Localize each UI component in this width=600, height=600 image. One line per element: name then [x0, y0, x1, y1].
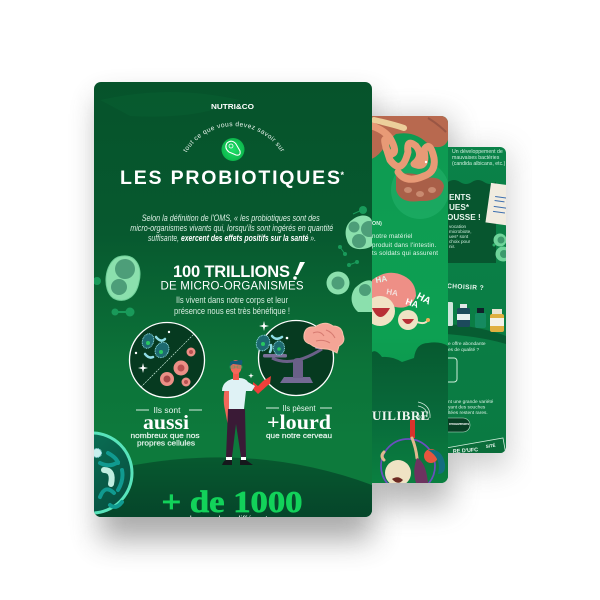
- icon: left bacteria cell: [93, 256, 140, 316]
- panel: front card: [94, 82, 372, 517]
- logo: NUTRI&CO: [211, 102, 254, 111]
- shelf: [448, 324, 506, 344]
- heading: back card: UES*: [449, 203, 470, 212]
- icon: leaflet: [485, 182, 506, 226]
- icon: person: [222, 360, 271, 465]
- heading: 100 trillions: 100 TRILLIONS: [173, 263, 290, 281]
- text: left stat: Ils sont: [154, 406, 181, 415]
- text: back body: nir.: [449, 244, 455, 249]
- title: LES PROBIOTIQUES: [120, 167, 340, 189]
- text: left stat: [130, 406, 202, 448]
- text: top note: Un développement de: [452, 149, 503, 155]
- text: mon matériel: produit dans l'intestin.: [372, 242, 437, 249]
- icon: hoop acrobat: [380, 420, 446, 483]
- icon: intestine and brain: [368, 116, 449, 219]
- text: back body: ues* sont: [449, 234, 469, 239]
- text: right stat: [266, 404, 332, 440]
- callout: ufc: SITÉ: [485, 443, 496, 449]
- definition text: micro-organismes vivants qui, lorsqu'ils sont ingérés en quantité: [130, 223, 333, 233]
- text: back body: choix pour: [449, 239, 471, 244]
- icon: signal arcs: [418, 402, 430, 418]
- dark wavy band: [372, 342, 448, 483]
- text: mon matériel: ts soldats qui assurent: [372, 250, 438, 257]
- icon: laughing brain: HA: [404, 296, 420, 310]
- icon: brain: [304, 323, 344, 353]
- hill: [94, 457, 372, 517]
- text: offre abondante: e offre abondante: [448, 341, 486, 347]
- text: back body: vocation: [449, 224, 467, 229]
- definition text: suffisante, exercent des effets positifs sur la santé ».: [148, 233, 349, 243]
- icon: laughing brain: HA: [386, 287, 399, 298]
- icon: laughing brain: HA: [415, 291, 433, 307]
- heading: back card: ENTS: [449, 193, 471, 202]
- subheading: DE MICRO-ORGANISMES: [160, 280, 304, 292]
- text: grande variété: ltées restent rares.: [448, 410, 488, 416]
- text: top note: mauvaises bactéries: [452, 155, 500, 161]
- panel: middle card: [372, 116, 448, 483]
- button: [448, 418, 470, 432]
- text: mon matériel: notre matériel: [372, 233, 413, 240]
- text: button label: renouvenons: [449, 422, 469, 426]
- icon: green probiotic badge: [222, 138, 244, 161]
- subtle tone shapes: [100, 92, 240, 117]
- icon: exclamation mark: [293, 262, 305, 280]
- heading: back card: OUSSE !: [447, 213, 481, 222]
- icon: laughing brain: HA: [375, 274, 388, 285]
- text: back body: microbiote,: [449, 229, 471, 234]
- icon: supplement bottles: [447, 302, 504, 332]
- text: top note: (candida albicans, etc.): [452, 161, 506, 167]
- title asterisk: *: [340, 170, 344, 180]
- callout: ufc: RE D'UFC: [453, 447, 478, 455]
- text: offre abondante: es de qualité ?: [448, 347, 480, 353]
- intro text: Ils vivent dans notre corps et leur: [176, 294, 288, 305]
- text: left stat: aussi: [143, 412, 189, 434]
- text: left stat: nombreux que nos: [130, 431, 200, 440]
- icon: right bacteria cluster: [326, 206, 377, 312]
- icon: balance circle with brain: [254, 320, 344, 396]
- text: grande variété: nt une grande variété: [448, 399, 494, 405]
- badge outline: [448, 358, 458, 382]
- text: superscript note: (50): [416, 415, 425, 421]
- text: cropped line: de souches différentes: [187, 514, 278, 524]
- heading: comment choisir: CHOISIR ?: [447, 283, 484, 292]
- icon: laughing brain: [372, 272, 430, 330]
- text: left stat: propres cellules: [137, 438, 195, 448]
- text: équilibre: UILIBRE: [372, 408, 430, 423]
- arc text: tout ce que vous devez savoir sur: [183, 122, 284, 152]
- callout: ufc: [448, 438, 506, 453]
- text: right stat: +lourd: [267, 410, 331, 434]
- card shadows: [100, 100, 508, 540]
- definition text: Selon la définition de l'OMS, « les probiotiques sont des: [142, 213, 320, 223]
- text: right stat: que notre cerveau: [266, 431, 332, 440]
- text: right stat: Ils pèsent: [282, 404, 316, 413]
- icon: bacteria vs cells circle: [130, 322, 204, 398]
- icon: microscope circle: [52, 433, 132, 513]
- panel: back card: [448, 147, 506, 453]
- text: mon matériel: ON): [372, 221, 382, 227]
- icon: cells: [492, 234, 506, 262]
- intro text: présence nous est très bénéfique !: [174, 305, 290, 316]
- text: grande variété: yant des souches: [448, 404, 486, 410]
- heading: + de 1000: + de 1000: [162, 484, 302, 519]
